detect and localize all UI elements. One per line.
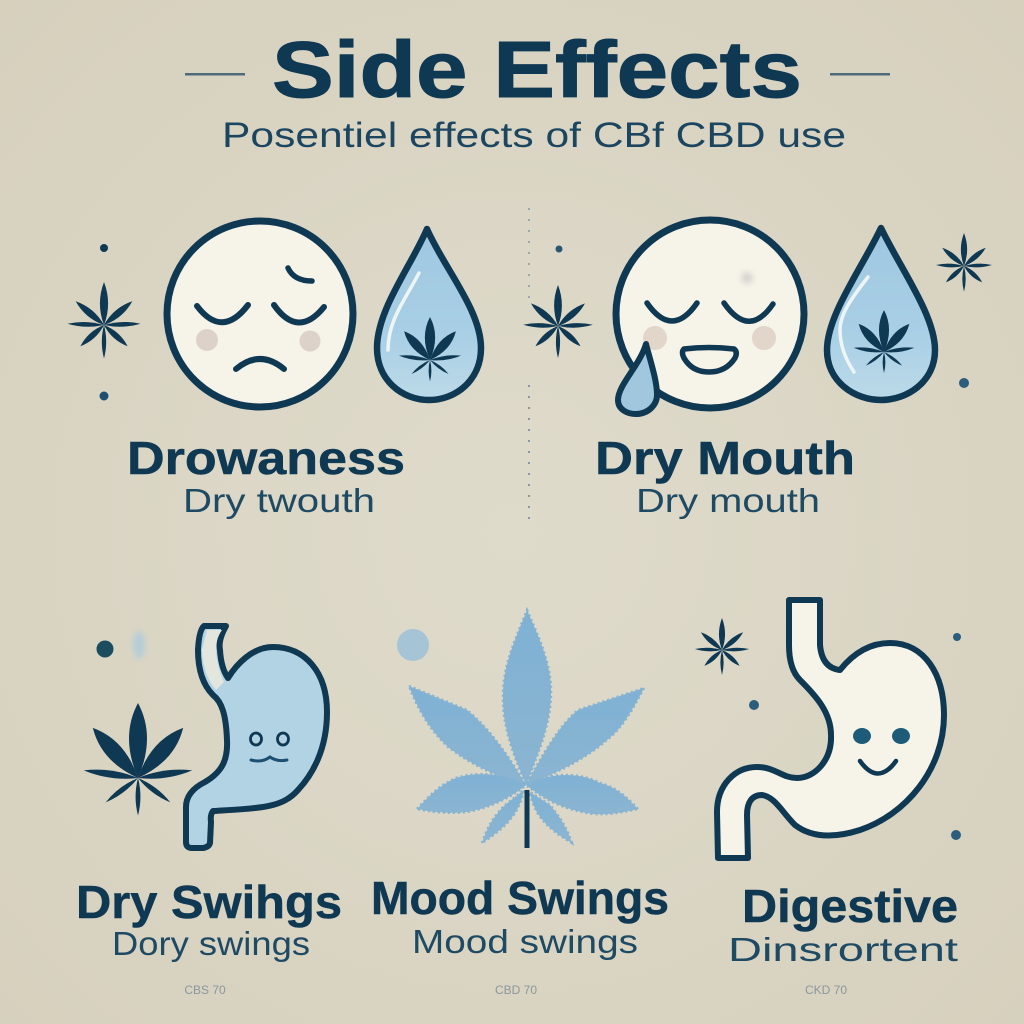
icon: water drop with leaf [377,229,481,400]
icon: star leaf [523,285,593,358]
icon: star leaf [695,618,749,675]
panel: mood swings [371,610,669,997]
icon: faint dot [397,629,429,661]
icon: dot [100,392,108,400]
text: Dry mouth [636,482,820,519]
icon: sleepy face [167,221,353,407]
icon: water drop with leaf [827,228,935,400]
heading: Digestive [742,880,958,932]
heading: Drowaness [127,432,405,484]
text: Dinsrortent [728,931,958,968]
icon: dot [96,640,114,658]
icon: faint mark [133,631,145,659]
icon: tear [618,344,657,414]
icon: dot [556,246,562,252]
icon: smiling face [616,220,804,408]
icon: large blue leaf [409,610,644,848]
subtitle: Posentiel effects of CBf CBD use [222,116,846,155]
panel: digestive discomfort [695,600,961,997]
text: Dry twouth [183,482,375,519]
heading: Dry Swihgs [76,876,342,928]
panel: dry mouth [523,220,992,519]
icon: cream stomach [717,600,944,858]
text: Mood swings [412,923,638,960]
icon: star leaf [67,282,141,359]
text: Dory swings [112,925,310,962]
icon: dot [749,700,759,710]
panel: dry swings [76,626,342,997]
icon: dark leaf [83,703,193,816]
icon: dot [953,633,961,641]
icon: dot [951,830,961,840]
icon: blue stomach [186,626,327,848]
heading: Mood Swings [371,872,669,924]
caption: CBS 70 [184,983,226,997]
icon: star leaf [936,233,992,292]
heading: Dry Mouth [595,432,855,484]
title: Side Effects [272,25,802,114]
panel: drowsiness [67,221,481,519]
icon: dot [959,378,969,388]
caption: CBD 70 [495,983,537,997]
icon: dot [100,244,108,252]
caption: CKD 70 [805,983,847,997]
